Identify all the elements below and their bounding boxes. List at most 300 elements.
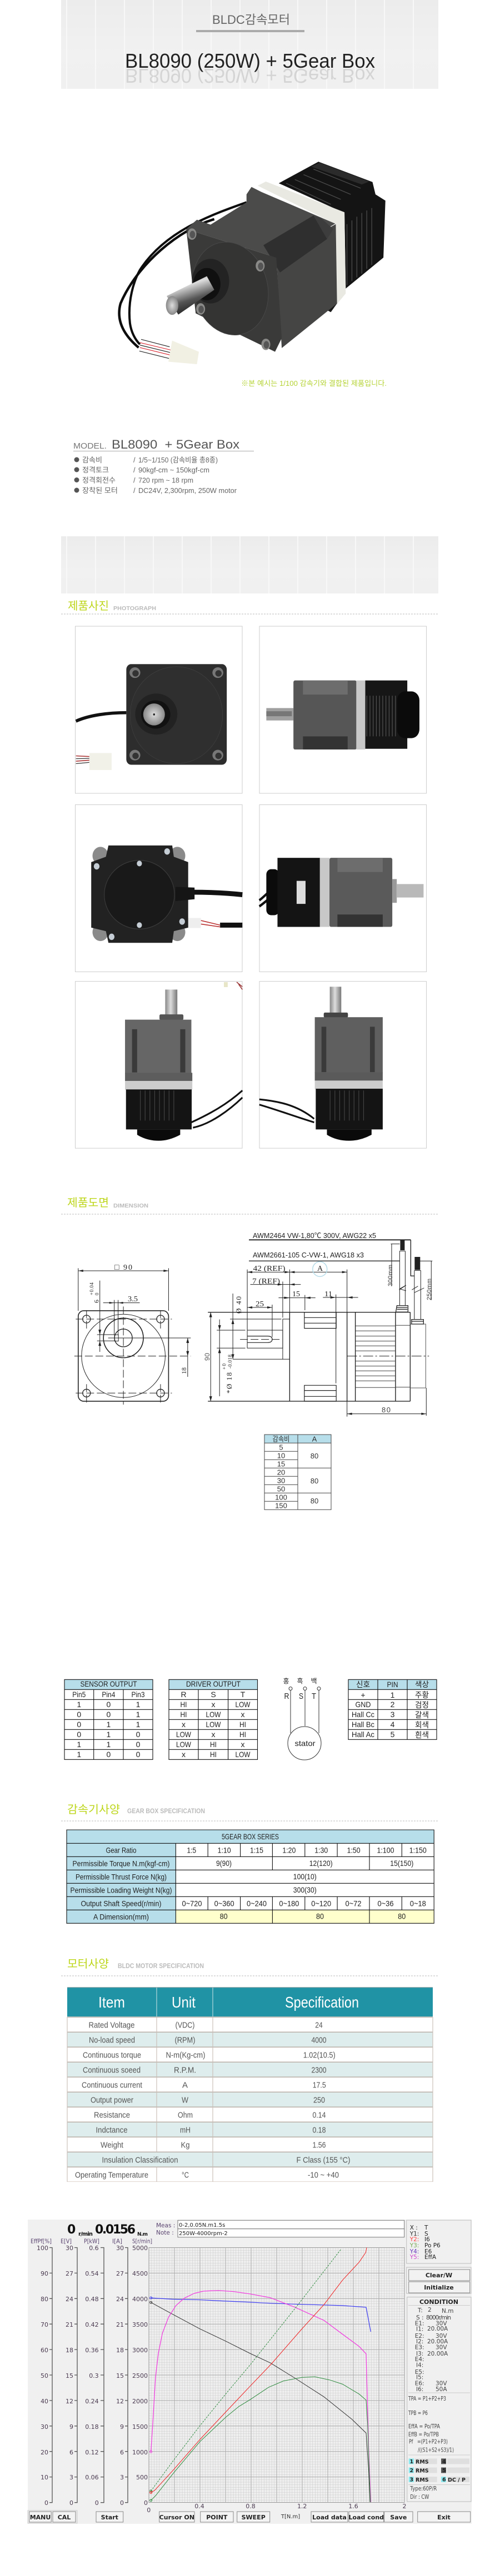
- axis tick labels: 0.24: [85, 2398, 99, 2405]
- photo: rear view: [91, 846, 242, 943]
- photo: side view left shaft: [266, 681, 419, 749]
- stator wiring diagram: S: [299, 1692, 303, 1701]
- condition values: 30V: [436, 2381, 447, 2387]
- gear box series table: Output Shaft Speed(r/min): [81, 1899, 161, 1908]
- section heading: product photos: PHOTOGRAPH: [113, 605, 156, 612]
- table rows: 24: [315, 2020, 323, 2030]
- axis tick labels: 1000: [132, 2449, 148, 2456]
- axis tick labels: 6: [69, 2449, 73, 2456]
- reduction ratio table: 20: [277, 1468, 285, 1477]
- category title: BLDC감속모터: [212, 13, 290, 27]
- table rows: Continuous soeed: [83, 2065, 141, 2075]
- dimension labels: [89, 1231, 433, 1414]
- dimension labels: 80: [382, 1406, 391, 1414]
- speed and torque readout: [67, 2223, 148, 2237]
- table rows: Insulation Classification: [102, 2155, 178, 2165]
- axis tick labels: 0.54: [85, 2270, 99, 2277]
- axis tick labels: 0.6: [89, 2245, 99, 2252]
- axis tick labels: 100: [37, 2245, 48, 2252]
- axis tick labels: 0: [44, 2499, 48, 2507]
- gear box series table: 1:20: [282, 1846, 296, 1855]
- channel indicators: 4: [442, 2459, 446, 2465]
- axis assignment legend: X :: [410, 2225, 418, 2231]
- table rows: 0.14: [312, 2110, 326, 2120]
- signal pin colour table: 3: [391, 1710, 395, 1719]
- condition values: 2: [428, 2307, 432, 2313]
- axis titles: S[r/min]: [132, 2238, 152, 2245]
- driver output table: LOW: [176, 1740, 192, 1749]
- dimension labels: 250mm: [426, 1279, 433, 1300]
- table rows: Indctance: [96, 2125, 128, 2135]
- dimension labels: 0: [94, 1292, 100, 1295]
- axis tick labels: 4000: [132, 2296, 148, 2303]
- axis tick labels: 30: [66, 2245, 73, 2252]
- sensor output table: 0: [136, 1750, 141, 1759]
- reduction ratio table: 80: [311, 1477, 318, 1485]
- table rows: 250: [313, 2095, 325, 2105]
- axis tick labels: 6: [120, 2449, 124, 2456]
- dimension labels: 90: [203, 1353, 211, 1361]
- axis tick labels: 12: [66, 2398, 73, 2405]
- gear box series table: 0~720: [182, 1899, 202, 1908]
- axis tick labels: 0.42: [85, 2321, 99, 2328]
- signal pin colour table: Hall Bc: [352, 1720, 374, 1729]
- sensor output table: Pin5: [72, 1690, 86, 1699]
- gear box series table: 9(90): [216, 1859, 232, 1868]
- header band: [61, 0, 438, 89]
- axis assignment legend: Y2:: [409, 2236, 419, 2243]
- channel indicators: [409, 2458, 469, 2483]
- dimension labels: +0.04: [89, 1282, 94, 1295]
- condition values: EffA = Po/TPA: [408, 2423, 441, 2430]
- gear box series table: 0~180: [279, 1899, 299, 1908]
- speed and torque readout: r/min: [78, 2231, 93, 2237]
- axis tick labels: 3: [120, 2474, 124, 2481]
- sensor output table: 0: [136, 1730, 141, 1739]
- axis tick labels: 0.18: [85, 2423, 99, 2431]
- sensor output table: SENSOR OUTPUT: [80, 1679, 137, 1688]
- control buttons: SWEEP: [242, 2514, 266, 2521]
- gear box series table: 80: [398, 1912, 406, 1921]
- axis assignment legend: [407, 2220, 471, 2263]
- dimension labels: 42 (REF): [253, 1265, 286, 1273]
- dimension labels: 11: [324, 1290, 332, 1299]
- section heading: dimension: DIMENSION: [113, 1203, 148, 1209]
- white ring: [258, 182, 346, 304]
- spec list: 정격회전수: [82, 476, 116, 484]
- dimension labels: AWM2464 VW-1,80℃ 300V, AWG22 x5: [253, 1231, 376, 1240]
- gear box series table: 0~72: [346, 1899, 362, 1908]
- gear box series table: 1:10: [218, 1846, 231, 1855]
- gear box series table: 1:30: [314, 1846, 328, 1855]
- condition panel: [407, 2297, 471, 2502]
- spec list: 90kgf-cm ~ 150kgf-cm: [138, 466, 209, 474]
- control buttons: POINT: [206, 2514, 228, 2521]
- signal pin colour table: Hall Ac: [352, 1730, 374, 1739]
- axis titles: P[kW]: [84, 2238, 99, 2245]
- axis assignment legend: E6: [424, 2248, 432, 2255]
- driver output table: [169, 1679, 258, 1759]
- sensor output table: 0: [107, 1750, 111, 1759]
- spec list: 1/5~1/150 (감속비율 총8종): [138, 456, 218, 464]
- gearbox: [186, 187, 336, 258]
- x axis labels: 2: [402, 2503, 407, 2510]
- photo frames: [76, 626, 427, 1148]
- axis tick labels: 70: [41, 2321, 48, 2328]
- table rows: N-m(Kg-cm): [166, 2050, 206, 2060]
- gear box series table: 100(10): [293, 1872, 317, 1881]
- condition values: I5:: [416, 2374, 423, 2381]
- condition values: E3:: [415, 2344, 424, 2351]
- axis tick labels: 0: [95, 2499, 99, 2507]
- table rows: Resistance: [94, 2110, 130, 2120]
- dimension labels: 25: [256, 1300, 264, 1309]
- control buttons: Load data: [312, 2514, 347, 2521]
- sensor output table: 1: [77, 1740, 81, 1749]
- signal pin colour table: [348, 1679, 437, 1739]
- gear box series table: 80: [220, 1912, 228, 1921]
- table rows: 17.5: [313, 2080, 326, 2090]
- signal pin colour table: 1: [391, 1690, 395, 1699]
- gear box series table: A Dimension(mm): [93, 1913, 149, 1921]
- sensor output table: 1: [136, 1710, 141, 1719]
- control buttons: Start: [101, 2514, 118, 2521]
- condition values: 30V: [436, 2321, 447, 2327]
- gear box series table: Gear Ratio: [106, 1846, 137, 1855]
- condition values: S :: [416, 2315, 424, 2321]
- axis assignment legend: Y5:: [409, 2254, 419, 2261]
- axis tick labels: 0.3: [89, 2372, 99, 2379]
- table rows: -10 ~ +40: [308, 2170, 339, 2180]
- table header: Specification: [285, 1994, 359, 2011]
- motor specification table: [67, 1987, 433, 2182]
- channel indicators: 2: [410, 2468, 413, 2474]
- signal pin colour table: 흰색: [415, 1730, 429, 1739]
- axis tick labels: 15: [66, 2372, 73, 2379]
- table rows: (RPM): [174, 2035, 196, 2045]
- spec list: 720 rpm ~ 18 rpm: [138, 476, 193, 484]
- dimension labels: +0: [222, 1364, 227, 1370]
- sensor output table: Pin4: [102, 1690, 116, 1699]
- condition values: 20.00A: [427, 2338, 448, 2345]
- title underline: [196, 30, 304, 32]
- condition values: T:: [417, 2307, 423, 2314]
- section heading: motor specification: 모터사양: [67, 1958, 109, 1970]
- sensor output table: 0: [107, 1700, 111, 1709]
- signal pin colour table: 검정: [415, 1700, 429, 1709]
- section heading: gear box specification: [61, 1803, 439, 1821]
- section heading: gear box specification: GEAR BOX SPECIFICATION: [127, 1807, 205, 1815]
- control buttons: Load cond: [349, 2514, 384, 2521]
- driver output table: HI: [180, 1700, 187, 1709]
- axis tick labels: 18: [66, 2347, 73, 2354]
- table rows: Kg: [181, 2140, 190, 2150]
- signal pin colour table: +: [361, 1690, 366, 1699]
- x axis labels: 0.8: [246, 2503, 256, 2510]
- table rows: 2300: [311, 2065, 327, 2075]
- driver output table: x: [182, 1750, 186, 1759]
- driver output table: S: [211, 1690, 216, 1699]
- gear box series table: 15(150): [390, 1859, 413, 1868]
- sensor output table: 1: [107, 1730, 111, 1739]
- driver output table: LOW: [206, 1710, 221, 1719]
- driver output table: R: [181, 1690, 187, 1699]
- performance curves: [150, 2247, 371, 2502]
- photo: top view right: [259, 987, 383, 1141]
- condition panel: CONDITION: [419, 2298, 458, 2306]
- table rows: Output power: [91, 2095, 133, 2105]
- dimension labels: 18: [180, 1367, 188, 1374]
- dimension labels: -0.018: [227, 1355, 233, 1368]
- axis assignment legend: Y4:: [409, 2248, 419, 2255]
- table rows: 1.56: [312, 2140, 326, 2150]
- table rows: Ohm: [178, 2110, 193, 2120]
- condition values: TPA = P1+P2+P3: [408, 2396, 446, 2402]
- sensor output table: 1: [77, 1700, 81, 1709]
- table rows: R.P.M.: [174, 2065, 196, 2075]
- signal pin colour table: 색상: [415, 1680, 429, 1689]
- reduction ratio table: 15: [277, 1460, 285, 1468]
- section heading: dimension: 제품도면: [67, 1196, 109, 1209]
- table rows: Continuous current: [82, 2080, 143, 2090]
- signal pin colour table: 2: [391, 1700, 395, 1709]
- condition values: [408, 2307, 454, 2500]
- condition values: 50A: [436, 2386, 447, 2393]
- condition values: EffB = Po/TPB: [408, 2431, 439, 2438]
- sensor output table: 1: [107, 1720, 111, 1729]
- sensor output table: 0: [107, 1710, 111, 1719]
- channel indicators: 3: [410, 2477, 413, 2483]
- driver output table: HI: [210, 1750, 217, 1759]
- channel indicators: 1: [410, 2459, 413, 2465]
- output shaft: [192, 259, 229, 304]
- axis tick labels: 90: [41, 2270, 48, 2277]
- wire bundle: [140, 343, 171, 355]
- axis tick labels: 12: [116, 2398, 124, 2405]
- reduction ratio table: [264, 1435, 331, 1510]
- sensor output table: [64, 1679, 153, 1759]
- signal pin colour table: 주황: [415, 1690, 429, 1699]
- axis titles: E[V]: [61, 2238, 72, 2245]
- reduction ratio table: 10: [277, 1451, 285, 1460]
- axis assignment legend: T: [424, 2225, 428, 2231]
- axis tick labels: 21: [116, 2321, 124, 2328]
- axis tick labels: 0.12: [85, 2449, 99, 2456]
- axis titles: [31, 2238, 152, 2245]
- condition values: 20.00A: [427, 2326, 448, 2332]
- section heading: motor specification: BLDC MOTOR SPECIFICATION: [118, 1962, 204, 1970]
- axis tick labels: 5000: [132, 2245, 148, 2252]
- table rows: Continuous torque: [83, 2050, 141, 2060]
- photo note: ※본 예시는 1/100 감속기와 결합된 제품입니다.: [241, 379, 387, 388]
- signal pin colour table: 신호: [356, 1680, 370, 1689]
- x axis labels: [147, 2503, 407, 2514]
- x axis labels: 1.6: [348, 2503, 358, 2510]
- reduction ratio table: 80: [311, 1452, 318, 1460]
- driver output table: LOW: [176, 1730, 192, 1739]
- reduction ratio table: 150: [275, 1501, 287, 1510]
- axis tick labels: 3500: [132, 2321, 148, 2328]
- model spec block: [73, 437, 254, 495]
- spec list: 장착된 모터: [82, 486, 118, 495]
- gear box series table: 1:100: [377, 1846, 394, 1855]
- measurement fields: 0-2,0.05N.m1.5s: [179, 2222, 225, 2228]
- spec list: DC24V, 2,300rpm, 250W motor: [138, 486, 237, 495]
- driver output table: LOW: [236, 1750, 251, 1759]
- table rows: [75, 2020, 350, 2180]
- stator wiring diagram: 홍: [283, 1677, 289, 1685]
- gear box series table: Permissible Thrust Force N(kg): [76, 1873, 167, 1881]
- axis tick labels: 9: [120, 2423, 124, 2431]
- dimension labels: 3.5: [128, 1295, 138, 1304]
- axis tick labels: [37, 2245, 148, 2507]
- clear and initialize buttons: Clear/W: [426, 2272, 452, 2279]
- product title: BL8090 (250W) + 5Gear Box: [125, 49, 375, 72]
- dimension drawing: front view: [74, 1268, 191, 1405]
- measurement fields: Meas :: [156, 2222, 175, 2229]
- stator wiring diagram: 백: [311, 1677, 317, 1685]
- axis tick labels: 0.36: [85, 2347, 99, 2354]
- axis tick labels: 0: [69, 2499, 73, 2507]
- clear and initialize buttons: [407, 2267, 471, 2293]
- condition values: I3:: [416, 2351, 423, 2357]
- channel indicators: 6: [442, 2477, 446, 2483]
- clear and initialize buttons: Initialize: [424, 2284, 454, 2291]
- dimension labels: A: [317, 1265, 323, 1273]
- axis assignment legend: Po P6: [424, 2242, 441, 2249]
- driver output table: HI: [210, 1740, 217, 1749]
- reduction ratio table: 30: [277, 1477, 285, 1485]
- x axis labels: 1.2: [297, 2503, 307, 2510]
- sensor output table: 0: [77, 1730, 81, 1739]
- axis tick labels: 50: [41, 2372, 48, 2379]
- axis assignment legend: Y1:: [409, 2231, 419, 2237]
- driver output table: DRIVER OUTPUT: [186, 1679, 241, 1688]
- gear box series table: 0~18: [410, 1899, 426, 1908]
- dimension labels: 6: [93, 1300, 101, 1303]
- measurement fields: [156, 2220, 404, 2237]
- section heading: product photos: [61, 600, 438, 614]
- gear box series table: [67, 1830, 434, 1923]
- table rows: Rated Voltage: [89, 2020, 134, 2030]
- gear box series table: 1:150: [409, 1846, 427, 1855]
- sensor output table: 1: [136, 1720, 141, 1729]
- sensor output table: 1: [107, 1740, 111, 1749]
- mounting holes: [187, 228, 271, 350]
- channel indicators: RMS: [416, 2468, 429, 2474]
- table rows: (VDC): [176, 2020, 194, 2030]
- signal pin colour table: 5: [391, 1730, 395, 1739]
- reduction ratio table: 80: [311, 1497, 318, 1505]
- axis tick labels: 3: [69, 2474, 73, 2481]
- sensor output table: 1: [77, 1750, 81, 1759]
- gear box series table: 0~240: [247, 1899, 267, 1908]
- table rows: 0.18: [312, 2125, 326, 2135]
- table header: Unit: [172, 1994, 196, 2011]
- spec list: /: [133, 466, 136, 474]
- dimension labels: AWM2661-105 C-VW-1, AWG18 x3: [253, 1251, 364, 1259]
- axis tick labels: 10: [41, 2474, 48, 2481]
- sensor output table: 0: [77, 1720, 81, 1729]
- axis tick labels: 27: [116, 2270, 124, 2277]
- table rows: mH: [180, 2125, 191, 2135]
- main product photo: geared motor: [119, 162, 386, 364]
- condition values: 30V: [436, 2333, 447, 2339]
- spec list: [74, 456, 237, 495]
- axis titles: I[A]: [112, 2238, 122, 2245]
- condition values: 20.00A: [427, 2351, 448, 2357]
- model spec block: BL8090 + 5Gear Box: [112, 437, 239, 451]
- driver output table: LOW: [236, 1700, 251, 1709]
- measurement fields: Note :: [156, 2230, 174, 2236]
- gear box series table: 0~360: [214, 1899, 234, 1908]
- section heading: product photos: 제품사진: [68, 600, 109, 612]
- spec list: /: [133, 486, 136, 495]
- signal pin colour table: GND: [356, 1700, 371, 1709]
- stator wiring diagram: 흑: [297, 1677, 303, 1685]
- condition values: N.m: [442, 2308, 453, 2315]
- table rows: 4000: [311, 2035, 327, 2045]
- table rows: No-load speed: [89, 2035, 135, 2045]
- measurement fields: 250W-4000rpm-2: [179, 2231, 228, 2237]
- axis tick labels: 80: [41, 2296, 48, 2303]
- gear box series table: 12(120): [309, 1859, 333, 1868]
- dimension labels: 7 (REF): [252, 1277, 280, 1286]
- cables: [119, 202, 247, 348]
- axis tick labels: 2000: [132, 2398, 148, 2405]
- spec list: 정격토크: [82, 466, 109, 474]
- reduction ratio table: 5: [279, 1443, 283, 1451]
- driver output table: LOW: [206, 1720, 221, 1729]
- y axes: [49, 2247, 128, 2503]
- signal pin colour table: Hall Cc: [352, 1710, 374, 1719]
- driver output table: HI: [239, 1730, 246, 1739]
- gear box series table: Permissible Torque N.m(kgf-cm): [72, 1859, 170, 1868]
- table rows: 1.02(10.5): [303, 2050, 336, 2060]
- control buttons: CAL: [58, 2514, 71, 2521]
- condition values: /((S1+S2+S3)/1): [418, 2447, 454, 2453]
- channel indicators: RMS: [416, 2477, 429, 2483]
- gear box series table: 1:50: [347, 1846, 361, 1855]
- axis tick labels: 0.06: [85, 2474, 99, 2481]
- gear box series table: 0~120: [311, 1899, 331, 1908]
- signal pin colour table: 4: [391, 1720, 395, 1729]
- condition values: I2:: [416, 2338, 423, 2345]
- condition values: 30V: [436, 2344, 447, 2351]
- axis assignment legend: EffA: [424, 2254, 437, 2261]
- table header: Item: [98, 1994, 125, 2011]
- table header: [67, 1987, 433, 2016]
- sensor output table: 0: [136, 1740, 141, 1749]
- axis titles: EffPf[%]: [31, 2238, 52, 2245]
- connector: [168, 341, 199, 364]
- channel indicators: RMS: [416, 2459, 429, 2465]
- condition values: Dir : CW: [410, 2494, 429, 2500]
- control buttons: [28, 2510, 471, 2523]
- dimension labels: Ø 40: [234, 1296, 243, 1314]
- speed and torque readout: 0: [67, 2223, 76, 2237]
- axis tick labels: 500: [136, 2474, 148, 2481]
- stator wiring diagram: stator: [294, 1739, 316, 1748]
- reduction ratio table: A: [312, 1435, 317, 1443]
- reduction ratio table: 50: [277, 1485, 285, 1493]
- spec list: /: [133, 456, 136, 464]
- axis tick labels: 0: [120, 2499, 124, 2507]
- axis tick labels: 21: [66, 2321, 73, 2328]
- axis tick labels: 30: [41, 2423, 48, 2431]
- control buttons: Save: [390, 2514, 407, 2521]
- driver output table: T: [241, 1690, 246, 1699]
